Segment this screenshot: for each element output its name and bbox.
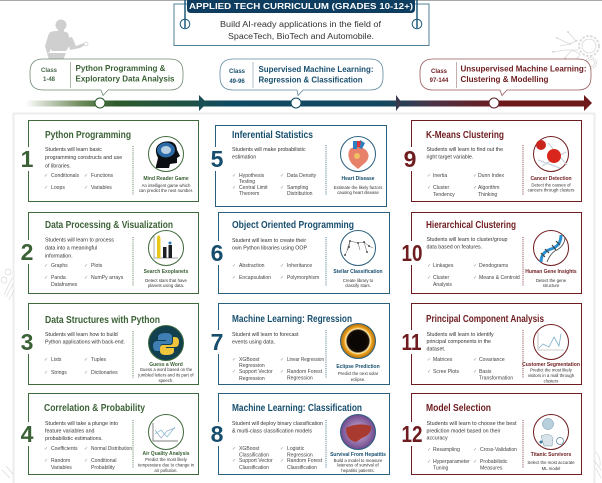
card 7: Machine Learning: Regression: Student will learn to forecast bbox=[232, 332, 299, 338]
card 9: K-Means Clustering: right target variable. bbox=[426, 154, 473, 160]
icon: heart bbox=[340, 136, 376, 172]
card 4: Correlation & Probability: Coefficients bbox=[51, 446, 78, 452]
icon: DNA helix bbox=[534, 230, 568, 266]
card 5: Inferential Statistics: Heart Disease bbox=[341, 176, 375, 182]
card 7: Machine Learning: Regression: ✓ bbox=[280, 357, 284, 363]
card 11: Principal Component Analysis: Principal Component Analysis bbox=[426, 314, 544, 325]
card 7: Machine Learning: Regression: ✓ bbox=[280, 369, 284, 375]
card 12: Model Selection: ✓ bbox=[427, 459, 431, 465]
callout: class 97-144 bbox=[420, 59, 591, 96]
card 11: Principal Component Analysis: Basis bbox=[479, 369, 492, 375]
card 6: Object Oriented Programming: own Python libraries using OOP bbox=[232, 246, 308, 252]
card 7: Machine Learning: Regression: Regression bbox=[239, 376, 265, 382]
card 4: Correlation & Probability: Students will take a plunge into bbox=[45, 421, 118, 427]
card 1: Python Programming: programming constructs and use bbox=[45, 155, 122, 161]
card 4: Correlation & Probability: Predict the most likely bbox=[145, 457, 188, 462]
card 2: Data Processing & Visualization: Panda bbox=[51, 275, 66, 281]
card 1: Python Programming: Variables bbox=[91, 185, 112, 191]
decorative sketches bbox=[1, 269, 601, 478]
card 12: Model Selection: Hyperparameter bbox=[433, 459, 470, 465]
card 8: Machine Learning: Classification: & multi-class classification models bbox=[232, 428, 312, 434]
card 11: Principal Component Analysis: visitors in a mall through bbox=[528, 373, 575, 378]
card 4: Correlation & Probability: temperature due to change in bbox=[138, 462, 195, 468]
card 8: Machine Learning: Classification: lateness of survival of bbox=[337, 462, 379, 468]
card 8: Machine Learning: Classification: XGBoost bbox=[239, 446, 260, 452]
card 4: Correlation & Probability: ✓ bbox=[44, 458, 48, 464]
card 11: Principal Component Analysis: ✓ bbox=[427, 357, 431, 363]
card 5: Inferential Statistics: ✓ bbox=[232, 173, 236, 179]
card 4: Correlation & Probability: air pollution. bbox=[154, 468, 178, 473]
header title bar bbox=[187, 0, 415, 13]
card 10: Hierarchical Clustering bbox=[402, 212, 582, 294]
card 10: Hierarchical Clustering: data based on features. bbox=[426, 244, 482, 250]
card 4: Correlation & Probability: 4 bbox=[21, 421, 34, 447]
card 8: Machine Learning: Classification: Build a model to measure bbox=[334, 458, 383, 463]
card 4: Correlation & Probability: ✓ bbox=[44, 446, 48, 452]
card 11: Principal Component Analysis: ✓ bbox=[473, 357, 477, 363]
card 2: Data Processing & Visualization: information. bbox=[45, 254, 73, 260]
card 3: Data Structures with Python: jumbled letters and its part of bbox=[137, 372, 194, 378]
card 12: Model Selection: Measures bbox=[480, 466, 503, 472]
card 11: Principal Component Analysis: Students will learn to identify bbox=[426, 332, 494, 338]
card 11: Principal Component Analysis: ✓ bbox=[473, 369, 477, 375]
card 3: Data Structures with Python: 3 bbox=[21, 329, 33, 355]
card 2: Data Processing & Visualization: planets using data. bbox=[148, 283, 184, 288]
card 6: Object Oriented Programming: ✓ bbox=[280, 263, 284, 269]
card 8: Machine Learning: Classification: Survival From Hepatitis bbox=[330, 452, 386, 458]
card 9: K-Means Clustering: ✓ bbox=[473, 173, 477, 179]
card 7: Machine Learning: Regression: Linear Regression bbox=[287, 357, 324, 363]
right pin bbox=[412, 0, 422, 29]
timeline bbox=[25, 95, 592, 111]
card 3: Data Structures with Python: Lists bbox=[51, 357, 62, 363]
card 8: Machine Learning: Classification: ✓ bbox=[280, 458, 284, 464]
card 7: Machine Learning: Regression: eclipse. bbox=[351, 377, 365, 382]
card 7: Machine Learning: Regression: ✓ bbox=[232, 369, 236, 375]
card 9: K-Means Clustering: Algorithm bbox=[478, 185, 500, 191]
card 12: Model Selection: ✓ bbox=[473, 459, 477, 465]
card 3: Data Structures with Python: Tuples bbox=[91, 357, 107, 363]
card 7: Machine Learning: Regression: Eclipse Prediction bbox=[336, 364, 380, 370]
card 4: Correlation & Probability: Random bbox=[51, 458, 70, 464]
icon: component plot bbox=[534, 324, 568, 360]
callout: class 97-144: Unsupervised Machine Learning: bbox=[460, 64, 586, 74]
card 2: Data Processing & Visualization: ✓ bbox=[84, 275, 88, 281]
card 9: K-Means Clustering: Students will learn to find out the bbox=[426, 147, 503, 153]
card 4: Correlation & Probability: ✓ bbox=[84, 458, 88, 464]
card 2: Data Processing & Visualization: Graphs bbox=[51, 263, 68, 269]
card 6: Object Oriented Programming: Student will learn to create their bbox=[232, 238, 306, 244]
card 11: Principal Component Analysis: Predict the most likely bbox=[530, 368, 573, 372]
card 10: Hierarchical Clustering: ✓ bbox=[473, 275, 477, 281]
card 10: Hierarchical Clustering: Means & Centroid bbox=[479, 275, 520, 281]
card 6: Object Oriented Programming: Polymorphism bbox=[287, 275, 319, 281]
card 11: Principal Component Analysis: 11 bbox=[402, 329, 422, 355]
card 8: Machine Learning: Classification: Student will deploy binary classification bbox=[232, 421, 323, 427]
card 1: Python Programming: Loops bbox=[51, 185, 65, 191]
card 9: K-Means Clustering: ✓ bbox=[473, 185, 477, 191]
card 4: Correlation & Probability: feature variables and bbox=[45, 428, 95, 434]
card 8: Machine Learning: Classification: Classification bbox=[287, 465, 317, 471]
card 5: Inferential Statistics bbox=[211, 126, 386, 206]
card 1: Python Programming: Mind Reader Game bbox=[143, 176, 189, 182]
card 5: Inferential Statistics: estimation bbox=[232, 154, 256, 160]
card 12: Model Selection: Probabilistic bbox=[480, 459, 508, 465]
card 8: Machine Learning: Classification bbox=[211, 394, 390, 474]
icon: constellation bbox=[340, 230, 376, 266]
card 8: Machine Learning: Classification: Random Forest bbox=[287, 458, 323, 464]
card 1: Python Programming: An intelligent game which bbox=[142, 183, 191, 188]
card 5: Inferential Statistics: Sampling bbox=[287, 185, 308, 191]
card 7: Machine Learning: Regression: Regression bbox=[239, 363, 265, 369]
icon: robot decoration bbox=[45, 20, 88, 60]
card 10: Hierarchical Clustering: Hierarchical Clustering bbox=[426, 220, 516, 231]
card 7: Machine Learning: Regression: Random Forest bbox=[287, 369, 323, 375]
card 8: Machine Learning: Classification: hepatitis patients. bbox=[341, 468, 375, 473]
card 12: Model Selection: Students will learn to choose the best bbox=[426, 421, 517, 427]
card 11: Principal Component Analysis: dataset. bbox=[426, 346, 445, 352]
card 6: Object Oriented Programming: Object Oriented Programming bbox=[232, 220, 354, 231]
card 10: Hierarchical Clustering: Dendograms bbox=[479, 263, 509, 269]
card 12: Model Selection bbox=[402, 394, 582, 474]
card 9: K-Means Clustering: Cluster bbox=[433, 185, 449, 191]
card 9: K-Means Clustering: ✓ bbox=[427, 185, 431, 191]
card 11: Principal Component Analysis bbox=[402, 304, 582, 384]
card 10: Hierarchical Clustering: ✓ bbox=[427, 275, 431, 281]
callout: class 97-144: Clustering & Modelling bbox=[460, 75, 548, 84]
card 11: Principal Component Analysis: Scree Plots bbox=[433, 369, 459, 375]
card 3: Data Structures with Python: ✓ bbox=[84, 357, 88, 363]
card 2: Data Processing & Visualization bbox=[21, 212, 198, 294]
card 10: Hierarchical Clustering: 10 bbox=[402, 240, 422, 266]
card 9: K-Means Clustering bbox=[404, 120, 582, 202]
card 1: Python Programming: of libraries. bbox=[45, 164, 71, 170]
icon: line chart bbox=[148, 414, 184, 450]
card 4: Correlation & Probability: Air Quality Analysis bbox=[142, 451, 190, 457]
card 8: Machine Learning: Classification: Classification bbox=[239, 452, 269, 458]
card 10: Hierarchical Clustering: ✓ bbox=[473, 263, 477, 269]
card 9: K-Means Clustering: ✓ bbox=[427, 173, 431, 179]
card 5: Inferential Statistics: Theorem bbox=[239, 191, 259, 197]
card 6: Object Oriented Programming: classify stars. bbox=[345, 283, 371, 288]
card 2: Data Processing & Visualization: 2 bbox=[21, 239, 33, 265]
card 5: Inferential Statistics: ✓ bbox=[280, 185, 284, 191]
card 10: Hierarchical Clustering: Students will learn to cluster/group bbox=[426, 237, 508, 243]
card 5: Inferential Statistics: Estimate the likely factors bbox=[334, 185, 382, 190]
card 5: Inferential Statistics: Central Limit bbox=[239, 185, 268, 191]
card 5: Inferential Statistics: Inferential Statistics bbox=[232, 130, 313, 141]
card 3: Data Structures with Python: ✓ bbox=[84, 370, 88, 376]
header title: APPLIED TECH CURRICULUM (GRADES 10-12+) bbox=[189, 1, 413, 11]
card 4: Correlation & Probability: Variables bbox=[51, 465, 72, 471]
card 6: Object Oriented Programming: Encapsulation bbox=[239, 275, 271, 281]
card 3: Data Structures with Python: Python applications with back-end. bbox=[45, 340, 125, 346]
card 1: Python Programming: Python Programming bbox=[45, 130, 131, 141]
callout: class 49-96: 49-96 bbox=[229, 79, 245, 85]
icon: gears and network decoration bbox=[552, 31, 599, 68]
card 1: Python Programming bbox=[21, 120, 198, 202]
card 9: K-Means Clustering: Thinking bbox=[478, 192, 497, 198]
card 4: Correlation & Probability: Conditional bbox=[91, 458, 116, 464]
card 1: Python Programming: ✓ bbox=[84, 185, 88, 191]
callout: class 97-144: 97-144 bbox=[430, 78, 449, 84]
card 11: Principal Component Analysis: Customer Segmentation bbox=[522, 362, 580, 368]
card 9: K-Means Clustering: Cancer Detection bbox=[530, 176, 572, 182]
card 12: Model Selection: Titanic Survivors bbox=[531, 452, 571, 458]
card 4: Correlation & Probability: Normal Distribution bbox=[91, 446, 132, 452]
header subtitle: Build AI-ready applications in the field of bbox=[220, 20, 382, 29]
card 3: Data Structures with Python: Guess a word based on the bbox=[140, 367, 193, 372]
card 5: Inferential Statistics: Testing bbox=[239, 179, 255, 185]
card 1: Python Programming: ✓ bbox=[44, 185, 48, 191]
card 12: Model Selection: ML model bbox=[542, 466, 560, 471]
card 4: Correlation & Probability: Probability bbox=[91, 465, 115, 471]
card 6: Object Oriented Programming: ✓ bbox=[232, 263, 236, 269]
callout: class 1-48: Exploratory Data Analysis bbox=[76, 74, 175, 84]
card 10: Hierarchical Clustering: ✓ bbox=[427, 263, 431, 269]
card 2: Data Processing & Visualization: NumPy arrays bbox=[91, 275, 124, 281]
card 2: Data Processing & Visualization: Plots bbox=[91, 263, 103, 269]
card 10: Hierarchical Clustering: Analysis bbox=[433, 282, 452, 288]
card 6: Object Oriented Programming: Stellar Classification bbox=[333, 269, 383, 275]
card 12: Model Selection: 12 bbox=[402, 421, 422, 447]
callout: class 1-48: Class bbox=[41, 68, 58, 74]
card 8: Machine Learning: Classification: ✓ bbox=[280, 446, 284, 452]
left pin bbox=[180, 0, 190, 29]
card 1: Python Programming: ✓ bbox=[44, 173, 48, 179]
card 12: Model Selection: accuracy bbox=[426, 436, 448, 442]
card 9: K-Means Clustering: Inertia bbox=[433, 173, 447, 179]
card 7: Machine Learning: Regression: XGBoost bbox=[239, 357, 260, 363]
header box bbox=[174, 4, 429, 46]
card 6: Object Oriented Programming: Inheritance bbox=[287, 263, 312, 269]
card 8: Machine Learning: Classification: Classification bbox=[239, 465, 269, 471]
card 2: Data Processing & Visualization: data into a meaningful bbox=[45, 246, 97, 252]
card 7: Machine Learning: Regression: ✓ bbox=[232, 357, 236, 363]
card 11: Principal Component Analysis: clusters bbox=[544, 378, 558, 384]
card 2: Data Processing & Visualization: ✓ bbox=[84, 263, 88, 269]
card 4: Correlation & Probability: probabilistic estimations. bbox=[45, 436, 103, 442]
callout: class 97-144: Class bbox=[431, 69, 448, 75]
card 2: Data Processing & Visualization: ✓ bbox=[44, 275, 48, 281]
card 5: Inferential Statistics: Data Density bbox=[287, 173, 317, 179]
callout: class 49-96: Supervised Machine Learning: bbox=[258, 65, 374, 74]
card 10: Hierarchical Clustering: structure bbox=[543, 283, 560, 288]
card 11: Principal Component Analysis: ✓ bbox=[427, 369, 431, 375]
card 5: Inferential Statistics: Hypothesis bbox=[239, 173, 265, 179]
card 3: Data Structures with Python bbox=[21, 304, 198, 384]
icon: ML head bbox=[534, 414, 568, 450]
card 10: Hierarchical Clustering: Cluster bbox=[433, 275, 449, 281]
card 9: K-Means Clustering: K-Means Clustering bbox=[426, 130, 504, 141]
card 8: Machine Learning: Classification: Logistic bbox=[287, 446, 305, 452]
card 11: Principal Component Analysis: Covariance bbox=[479, 357, 505, 363]
card 6: Object Oriented Programming: ✓ bbox=[232, 275, 236, 281]
callout: class 1-48 bbox=[30, 59, 183, 96]
card 7: Machine Learning: Regression: 7 bbox=[211, 329, 223, 355]
card 8: Machine Learning: Classification: 8 bbox=[211, 421, 224, 447]
card 3: Data Structures with Python: Dictionaries bbox=[91, 370, 118, 376]
icon: python logo bbox=[148, 326, 184, 360]
callout: class 49-96: Regression & Classification bbox=[258, 76, 362, 84]
card 9: K-Means Clustering: 9 bbox=[404, 146, 416, 172]
card 7: Machine Learning: Regression bbox=[211, 304, 390, 384]
card 7: Machine Learning: Regression: events using data. bbox=[232, 340, 275, 346]
card 11: Principal Component Analysis: Transformation bbox=[479, 376, 513, 382]
card 10: Hierarchical Clustering: Linkages bbox=[433, 263, 454, 269]
card 7: Machine Learning: Regression: Regression bbox=[287, 376, 313, 382]
card 12: Model Selection: Resampling bbox=[433, 447, 460, 453]
card 3: Data Structures with Python: ✓ bbox=[44, 370, 48, 376]
card 12: Model Selection: ✓ bbox=[473, 447, 477, 453]
card 5: Inferential Statistics: Distribution bbox=[287, 191, 313, 197]
card 1: Python Programming: Conditionals bbox=[51, 173, 79, 179]
card 7: Machine Learning: Regression: Support Vector bbox=[239, 369, 273, 375]
card 1: Python Programming: 1 bbox=[21, 146, 34, 172]
card 6: Object Oriented Programming bbox=[211, 212, 390, 294]
card 8: Machine Learning: Classification: Regression bbox=[287, 452, 313, 458]
header subtitle bbox=[220, 20, 382, 41]
callout: class 1-48: 1-48 bbox=[43, 77, 56, 83]
card 2: Data Processing & Visualization: Search Exoplanets bbox=[144, 269, 189, 275]
card 1: Python Programming: can predict the next number. bbox=[139, 188, 193, 193]
header block bbox=[174, 0, 429, 46]
icon: bar chart bbox=[148, 230, 184, 266]
card 7: Machine Learning: Regression: Predict the next solar bbox=[338, 371, 379, 376]
card 6: Object Oriented Programming: Create library to bbox=[343, 278, 374, 283]
card 3: Data Structures with Python: speech. bbox=[158, 378, 174, 383]
card 8: Machine Learning: Classification: ✓ bbox=[232, 446, 236, 452]
card 1: Python Programming: ✓ bbox=[84, 173, 88, 179]
callout: class 1-48: Python Programming & bbox=[76, 64, 166, 73]
card 12: Model Selection: prediction model based on their bbox=[426, 428, 501, 434]
icon: cancer cells bbox=[534, 136, 568, 172]
card 10: Hierarchical Clustering: Detect the gene bbox=[536, 278, 567, 283]
card 3: Data Structures with Python: Guess a Word bbox=[149, 362, 183, 368]
card 6: Object Oriented Programming: 6 bbox=[211, 240, 223, 266]
card 12: Model Selection: Tuning bbox=[433, 466, 449, 472]
icon: eclipse bbox=[340, 324, 376, 358]
card 5: Inferential Statistics: 5 bbox=[211, 146, 224, 172]
card 11: Principal Component Analysis: principal components in the bbox=[426, 339, 491, 345]
card 2: Data Processing & Visualization: Students will learn to process bbox=[45, 238, 114, 244]
card 9: K-Means Clustering: Dunn Index bbox=[478, 173, 505, 179]
card 2: Data Processing & Visualization: ✓ bbox=[44, 263, 48, 269]
card 5: Inferential Statistics: ✓ bbox=[232, 185, 236, 191]
card 8: Machine Learning: Classification: Machine Learning: Classification bbox=[232, 403, 362, 414]
card 8: Machine Learning: Classification: Support Vector bbox=[239, 458, 273, 464]
callout: class 49-96: Class bbox=[229, 69, 246, 75]
card 2: Data Processing & Visualization: Dataframes bbox=[51, 282, 78, 288]
card 5: Inferential Statistics: ✓ bbox=[280, 173, 284, 179]
card 3: Data Structures with Python: Students will learn how to build bbox=[45, 332, 118, 338]
header subtitle: SpaceTech, BioTech and Automobile. bbox=[228, 32, 374, 41]
card 9: K-Means Clustering: Detect the causes of bbox=[531, 182, 571, 188]
card 6: Object Oriented Programming: ✓ bbox=[280, 275, 284, 281]
card 5: Inferential Statistics: causing heart disease bbox=[337, 190, 380, 195]
card 1: Python Programming: Students will learn basic bbox=[45, 147, 102, 153]
card 8: Machine Learning: Classification: ✓ bbox=[232, 458, 236, 464]
card 12: Model Selection: Cross-Validation bbox=[480, 447, 517, 453]
card 6: Object Oriented Programming: Abstraction bbox=[239, 263, 265, 269]
card 3: Data Structures with Python: Data Structures with Python bbox=[45, 315, 160, 326]
card 12: Model Selection: ✓ bbox=[427, 447, 431, 453]
icon: liver bbox=[340, 414, 376, 450]
card 7: Machine Learning: Regression: Machine Learning: Regression bbox=[232, 314, 352, 325]
card 3: Data Structures with Python: ✓ bbox=[44, 357, 48, 363]
top rule bbox=[0, 0, 602, 1]
card 9: K-Means Clustering: Tendency bbox=[433, 192, 455, 198]
card 12: Model Selection: Model Selection bbox=[426, 403, 491, 414]
card 1: Python Programming: Functions bbox=[91, 173, 114, 179]
callout: class 49-96 bbox=[220, 59, 383, 96]
card 3: Data Structures with Python: Strings bbox=[51, 370, 67, 376]
card 4: Correlation & Probability: Correlation & Probability bbox=[44, 403, 145, 414]
card 5: Inferential Statistics: Students will make probabilistic bbox=[232, 147, 306, 153]
panel: background bbox=[14, 114, 594, 483]
card 4: Correlation & Probability bbox=[21, 394, 198, 474]
icon: brain bbox=[148, 136, 184, 172]
card 2: Data Processing & Visualization: Detect stars that have bbox=[145, 278, 188, 283]
card 11: Principal Component Analysis: Matrices bbox=[433, 357, 453, 363]
card 9: K-Means Clustering: cancers through clusters bbox=[528, 188, 574, 192]
card 4: Correlation & Probability: ✓ bbox=[84, 446, 88, 452]
card 10: Hierarchical Clustering: Human Gene Insights bbox=[525, 269, 577, 275]
card 12: Model Selection: Select the most accurate bbox=[527, 460, 575, 465]
card 2: Data Processing & Visualization: Data Processing & Visualization bbox=[45, 220, 173, 231]
